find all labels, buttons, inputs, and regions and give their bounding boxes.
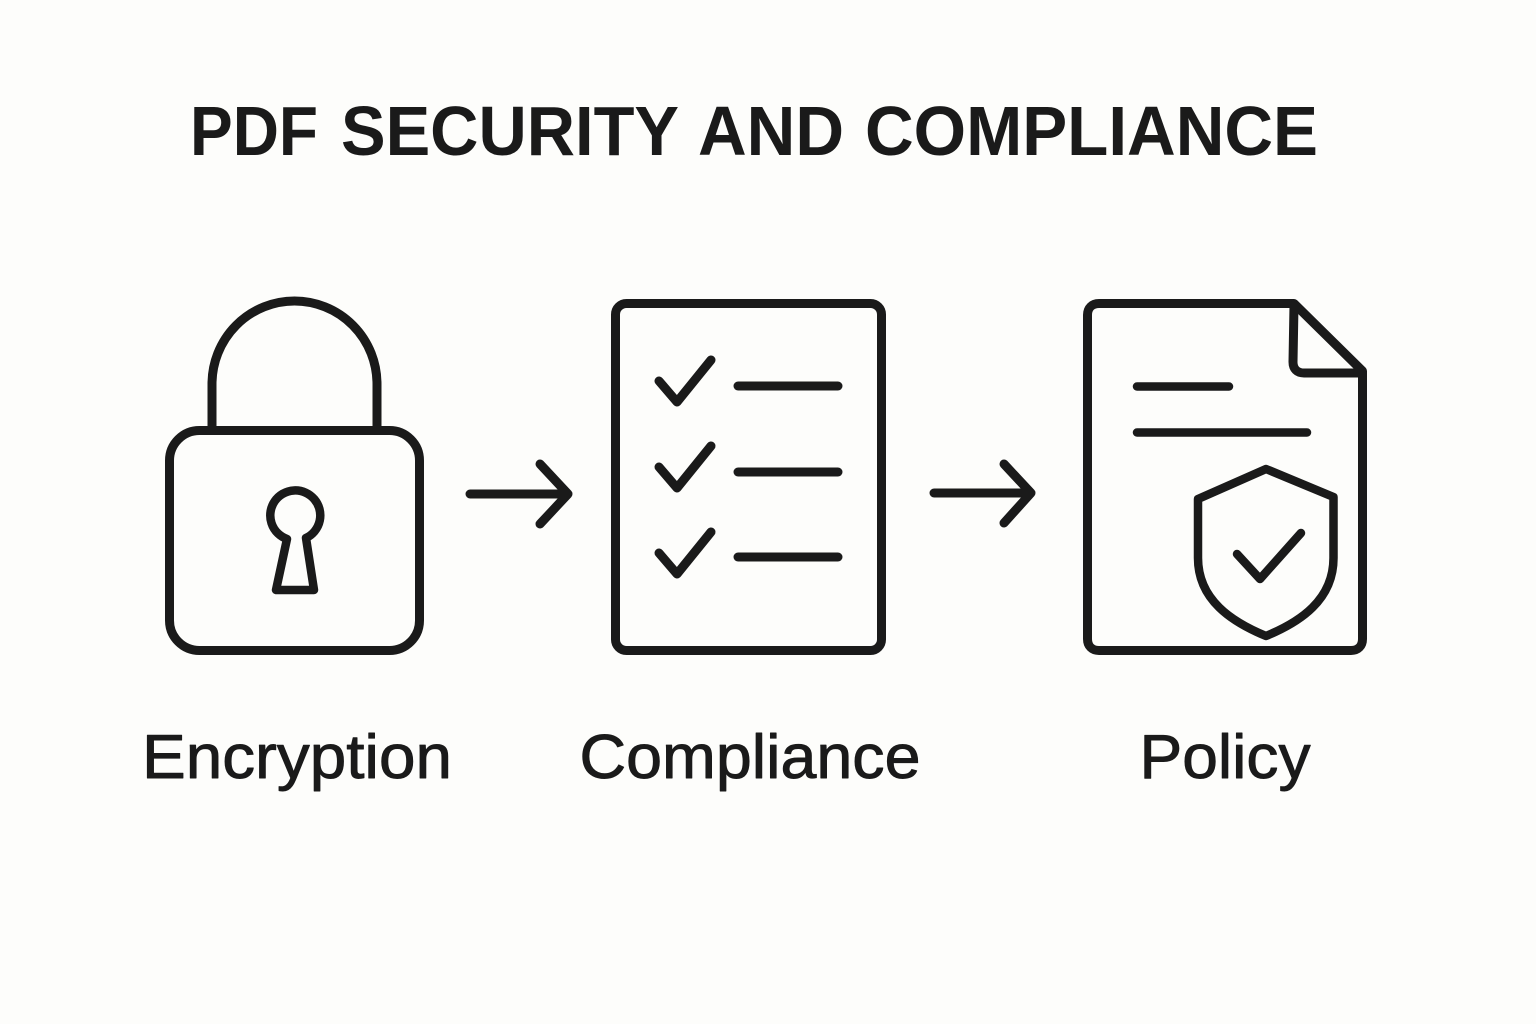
icon: padlock: [170, 301, 420, 650]
label: Policy: Policy: [1140, 722, 1311, 792]
title: AND: [698, 92, 844, 170]
title: SECURITY: [341, 92, 679, 170]
icon: compliance checklist: [616, 304, 882, 650]
title: [190, 92, 1318, 170]
title: COMPLIANCE: [865, 92, 1318, 170]
title: PDF: [190, 92, 318, 170]
label: Compliance: Compliance: [580, 722, 920, 792]
arrow: encryption to compliance: [470, 464, 568, 524]
icon: policy document with shield: [1088, 304, 1362, 650]
label: Encryption: Encryption: [142, 722, 452, 792]
arrow: compliance to policy: [934, 464, 1031, 523]
